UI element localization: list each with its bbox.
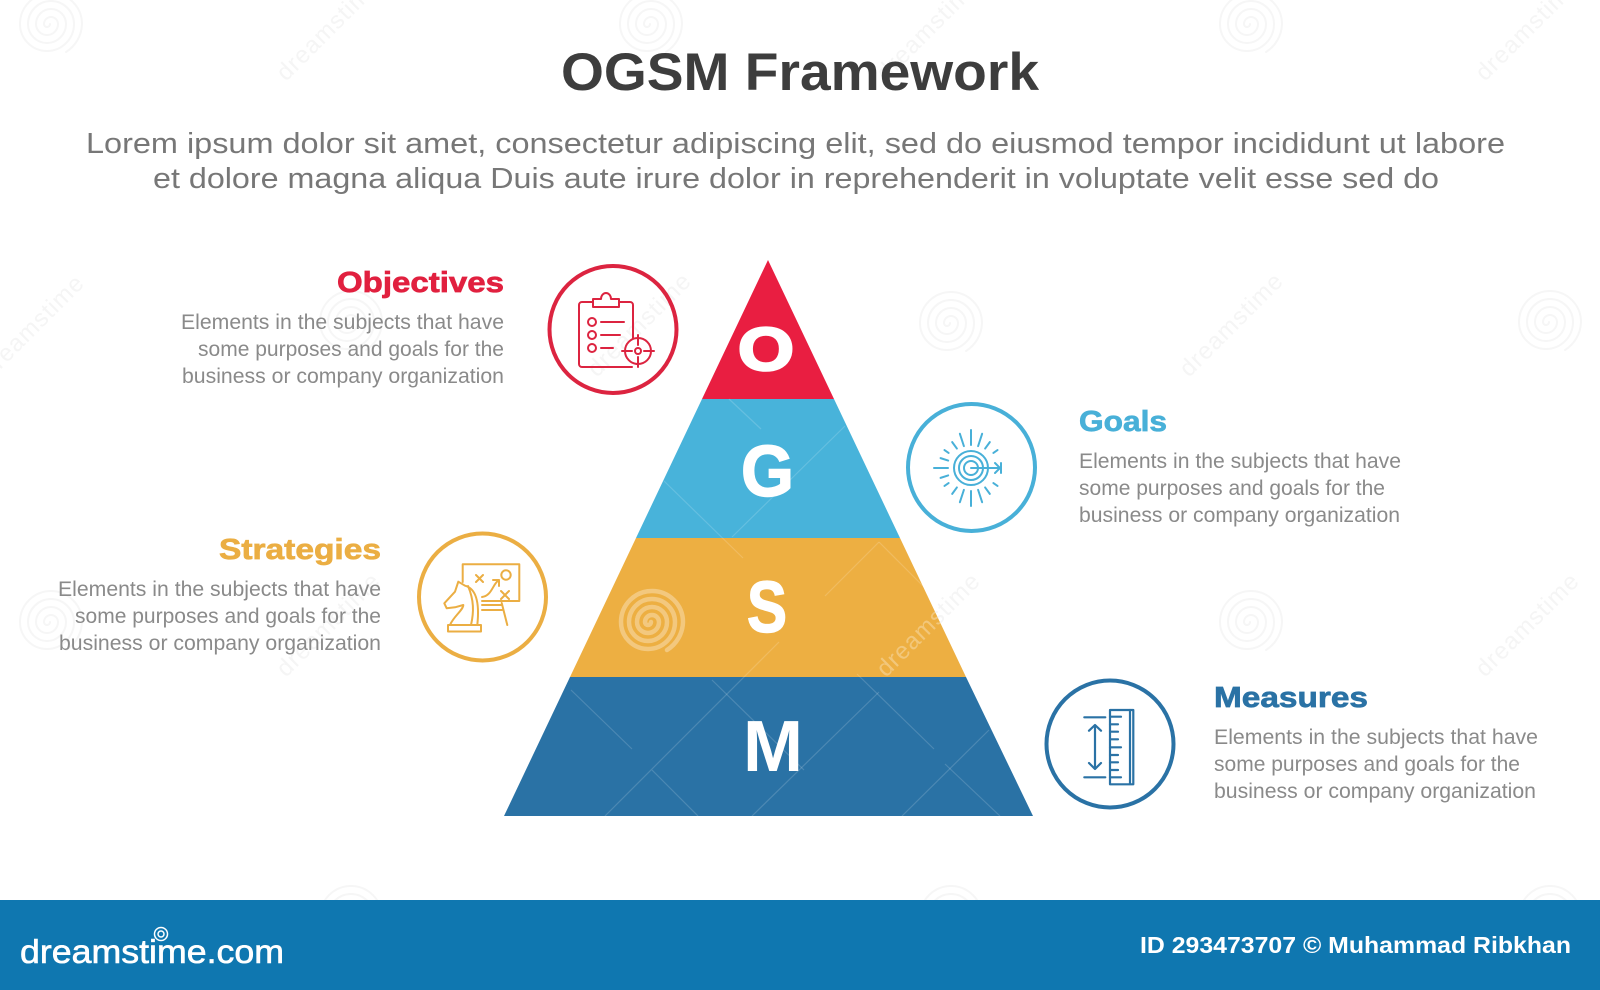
goals body	[1079, 449, 1401, 527]
watermark background: dreamstime	[1174, 267, 1289, 382]
measures heading: Measures	[1214, 682, 1368, 714]
letter G: G	[741, 432, 794, 512]
icon: strategies chess knight and board	[419, 534, 546, 660]
watermark overlay on pyramid: dreamstime	[871, 567, 986, 682]
strategies body	[58, 577, 381, 655]
pyramid tier S	[570, 538, 966, 677]
strategies body: some purposes and goals for the	[75, 604, 381, 628]
watermark background: dreamstime	[271, 567, 386, 682]
letter S: S	[747, 568, 787, 648]
footer credit: ID 293473707 © Muhammad Ribkhan	[1140, 932, 1571, 958]
strategies body: Elements in the subjects that have	[58, 577, 381, 601]
measures body	[1214, 725, 1538, 803]
subtitle text: et dolore magna aliqua Duis aute irure dolor in reprehenderit in voluptate velit esse sed do	[153, 163, 1439, 195]
icon: goals target with rays	[908, 404, 1035, 531]
watermark background: dreamstime	[582, 267, 697, 382]
goals heading: Goals	[1079, 406, 1167, 438]
goals body: Elements in the subjects that have	[1079, 449, 1401, 473]
strategies body: business or company organization	[59, 631, 381, 655]
letter O: O	[738, 316, 794, 383]
letter M: M	[743, 707, 803, 787]
objectives body	[181, 310, 504, 388]
title: OGSM Framework	[561, 43, 1040, 102]
pyramid tier G	[636, 399, 900, 538]
pyramid tier M	[504, 677, 1033, 816]
goals body: business or company organization	[1079, 503, 1400, 527]
objectives body: Elements in the subjects that have	[181, 310, 504, 334]
objectives heading: Objectives	[337, 267, 504, 299]
measures body: some purposes and goals for the	[1214, 752, 1520, 776]
panel: objectives text	[181, 267, 504, 388]
objectives body: some purposes and goals for the	[198, 337, 504, 361]
panel: goals text	[1079, 406, 1401, 527]
panel: strategies text	[58, 534, 381, 655]
subtitle text: Lorem ipsum dolor sit amet, consectetur adipiscing elit, sed do eiusmod tempor incididunt ut labore	[86, 128, 1505, 160]
objectives body: business or company organization	[182, 364, 504, 388]
footer logo: dreamstime.com	[20, 933, 284, 970]
strategies heading: Strategies	[219, 534, 381, 566]
icon: logo spiral	[154, 928, 168, 940]
watermark background: dreamstime	[871, 567, 986, 682]
icon: objectives clipboard and target	[550, 266, 676, 393]
pyramid chart	[504, 260, 1033, 816]
watermark background: dreamstime	[1470, 567, 1585, 682]
measures body: Elements in the subjects that have	[1214, 725, 1538, 749]
panel: measures text	[1214, 682, 1538, 803]
subtitle text	[86, 128, 1505, 195]
measures body: business or company organization	[1214, 779, 1536, 803]
goals body: some purposes and goals for the	[1079, 476, 1385, 500]
watermark overlay on pyramid	[571, 399, 1000, 816]
pyramid tier O	[702, 260, 834, 399]
footer bar	[0, 900, 1600, 990]
icon: measures ruler and height arrow	[1046, 680, 1174, 808]
